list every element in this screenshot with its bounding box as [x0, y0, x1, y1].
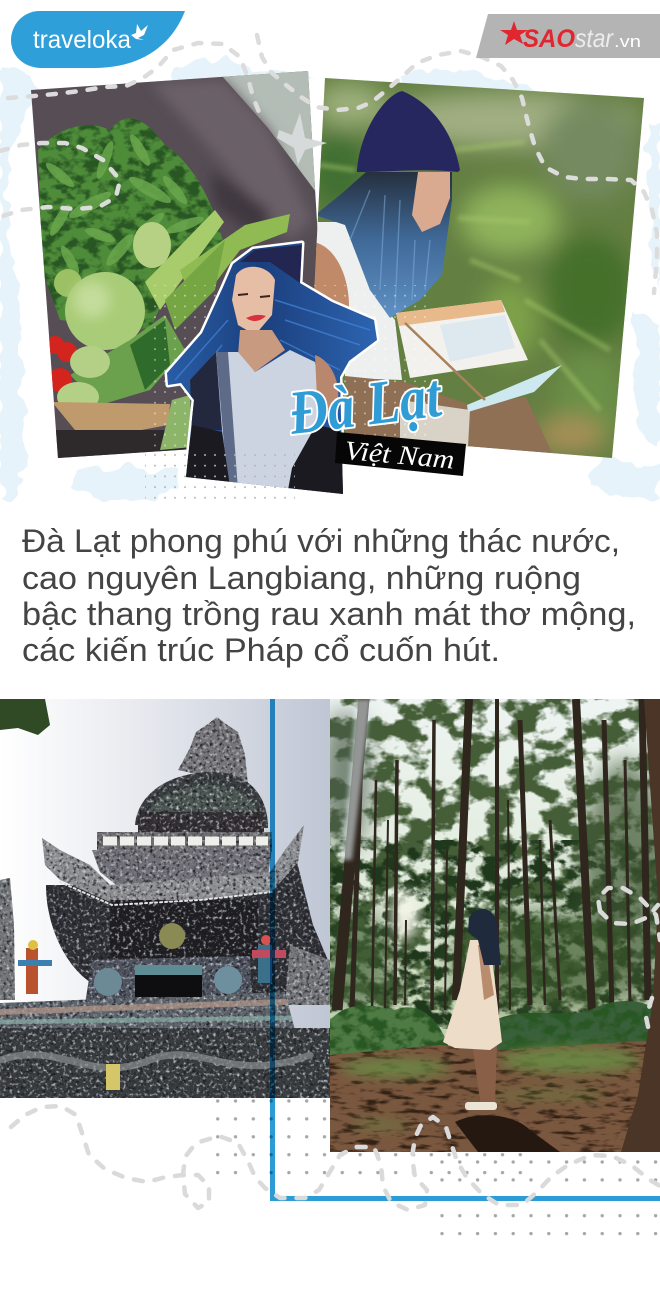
description text: cao nguyên Langbiang, những ruộng — [22, 560, 581, 596]
ground shadow — [455, 1115, 560, 1152]
green leaves over basket — [70, 315, 185, 405]
smiling face — [232, 267, 275, 335]
big leaf — [160, 395, 192, 450]
world map background — [0, 56, 660, 500]
Việt Nam text: Việt Nam — [343, 435, 456, 475]
photo: girl painting in forest — [300, 70, 650, 465]
blue hair — [160, 240, 385, 500]
Traveloka logo — [11, 11, 185, 68]
girl in white dress — [443, 909, 502, 1110]
facade — [85, 956, 252, 1004]
cut-out portrait with white outline — [160, 240, 385, 500]
basket — [54, 402, 170, 430]
Saostar logo — [476, 14, 660, 58]
door — [135, 973, 202, 997]
dot grid below portrait — [145, 450, 295, 500]
ground — [330, 1040, 660, 1152]
door sign — [135, 965, 202, 975]
carved base — [0, 1028, 330, 1098]
bottle gourd — [54, 269, 145, 350]
logo blue badge — [11, 11, 185, 68]
description text — [22, 523, 636, 668]
blue frame vertical line — [270, 699, 275, 1200]
black jacket right — [288, 425, 345, 495]
dot grid lower left — [209, 1098, 331, 1152]
ferns — [320, 142, 610, 410]
Saostar logo: star — [575, 23, 614, 53]
hair — [468, 909, 501, 965]
pine trunks — [337, 699, 648, 1015]
individual leaves — [43, 132, 206, 276]
guava — [133, 222, 171, 268]
tile rows — [0, 882, 310, 1068]
photo: vegetables — [31, 71, 318, 458]
dress — [443, 940, 502, 1050]
bright gap — [392, 891, 418, 939]
shoulder — [314, 242, 349, 306]
photo: pine forest — [320, 699, 660, 1152]
sky — [0, 699, 330, 1098]
tank top — [310, 222, 402, 380]
photo: mosaic pagoda — [0, 699, 330, 1098]
left small tower — [0, 878, 15, 1000]
small gold figure — [106, 1064, 120, 1090]
foliage top left — [0, 699, 50, 735]
balustrade — [0, 992, 295, 1030]
forest background — [300, 70, 650, 465]
paint pad — [467, 365, 562, 412]
hair strands — [175, 300, 370, 385]
dashed flight routes top — [0, 35, 657, 293]
leaf mass — [38, 118, 225, 330]
upper eave — [92, 848, 272, 888]
dark base — [56, 430, 186, 458]
under eave dark — [110, 900, 258, 958]
shoulder — [315, 355, 338, 420]
pagoda body — [0, 717, 330, 1098]
black jacket left — [185, 425, 230, 487]
shoes — [465, 1102, 497, 1110]
sun beam — [342, 699, 371, 860]
brush — [405, 323, 485, 400]
skirt — [400, 400, 470, 447]
roof edge and dragons — [42, 825, 304, 902]
tomatoes — [46, 336, 77, 392]
small guavas — [57, 346, 110, 403]
dot grid lower right — [433, 1153, 660, 1242]
watercolor palette — [396, 300, 528, 378]
beanie hat — [357, 91, 460, 172]
dashed flight routes bottom — [11, 888, 660, 1210]
script title Đà Lạt: Đà Lạt — [285, 362, 446, 448]
niche statues — [94, 923, 242, 996]
description text: các kiến trúc Pháp cổ cuốn hút. — [22, 632, 500, 668]
blue hair — [315, 172, 452, 318]
dome inner — [146, 785, 258, 815]
lotus balcony band — [103, 836, 268, 846]
main curved roof — [46, 862, 330, 1005]
upper room — [138, 812, 264, 836]
sky and canopy base — [330, 699, 660, 1152]
balcony — [97, 832, 272, 852]
forest light and dark areas — [310, 83, 640, 453]
icon: bird — [131, 24, 148, 40]
grey banner — [476, 14, 660, 58]
top shadow — [216, 352, 238, 490]
white dots over photos — [150, 285, 430, 457]
dark left and right masses — [320, 710, 660, 1010]
dot grid lower band — [209, 1146, 529, 1182]
face — [412, 172, 450, 232]
guardian statue left — [18, 940, 52, 994]
description text: Đà Lạt phong phú với những thác nước, — [22, 523, 620, 559]
long beans — [145, 210, 290, 330]
icon: star — [500, 21, 528, 45]
canopy foliage — [330, 699, 660, 1029]
sleeveless top — [216, 350, 322, 490]
light corner — [223, 71, 316, 190]
dark under-hair — [190, 352, 222, 430]
logo wordmark: traveloka — [33, 26, 131, 54]
guardian statue right — [252, 935, 286, 983]
dark foliage — [330, 840, 660, 1030]
dome — [135, 772, 268, 828]
beanie hat — [240, 245, 302, 283]
spire — [178, 717, 248, 785]
arm — [478, 945, 494, 1000]
large tree right — [621, 699, 660, 1152]
Saostar logo: .vn — [614, 32, 641, 51]
cloth background — [31, 71, 318, 458]
blue frame horizontal line — [270, 1196, 660, 1201]
description text: bậc thang trồng rau xanh mát thơ mộng, — [22, 596, 636, 632]
shrubs — [330, 1001, 660, 1062]
icon: plane — [277, 113, 327, 165]
right building wing — [285, 945, 330, 1005]
forearm and lap — [345, 376, 552, 453]
neck — [238, 330, 285, 372]
eyes and lips — [238, 294, 270, 321]
black Việt Nam label — [335, 432, 466, 476]
logo wordmark: SAO — [523, 25, 576, 53]
cloth folds — [150, 80, 312, 240]
legs — [472, 1042, 497, 1107]
grass patches — [340, 1047, 640, 1130]
white outline — [167, 243, 377, 494]
hair strands — [350, 190, 430, 310]
black box — [335, 432, 466, 476]
